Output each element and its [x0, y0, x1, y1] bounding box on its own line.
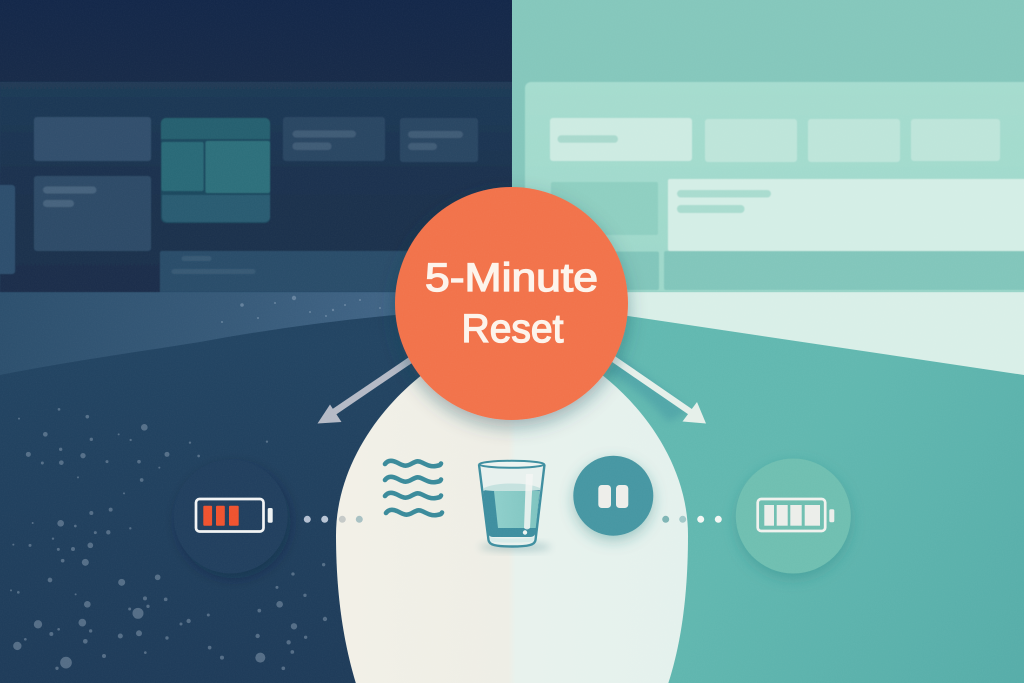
- card: top three: [808, 119, 900, 162]
- dots: right connector: [662, 516, 722, 523]
- card: side block: [551, 182, 658, 235]
- card: teal grid: [161, 118, 270, 223]
- card: top two: [705, 119, 797, 162]
- icon: breathing waves: [385, 461, 442, 515]
- dots: left connector: [304, 516, 363, 523]
- panel: left dimmed dashboard: [0, 82, 512, 292]
- speckles: scattered dust on left side: [10, 408, 327, 670]
- title: Reset: Reset: [462, 307, 564, 351]
- card: bottom wide: [664, 251, 1024, 290]
- card: small top with lines: [400, 118, 478, 162]
- card: plain top: [34, 117, 151, 161]
- panel: right bright dashboard: [520, 82, 1024, 292]
- right lighter wedge band: [512, 292, 1024, 375]
- panel: left depleted side background: [0, 0, 512, 683]
- icon: pause button: [573, 456, 653, 536]
- title: 5-Minute: 5-Minute: [425, 256, 598, 300]
- left lighter curved band: [0, 292, 512, 375]
- card: middle with lines: [34, 176, 151, 251]
- card: top with lines: [283, 117, 385, 161]
- badge: low battery: [174, 460, 288, 574]
- card: active top with line: [550, 118, 692, 161]
- arrow: shadow strip on right: [606, 358, 690, 422]
- card: main with lines: [668, 179, 1024, 251]
- card: left edge stub: [0, 185, 15, 274]
- icon: glass of water: [479, 461, 551, 551]
- panel: right side background: [512, 0, 1024, 683]
- reset circle with title: [395, 187, 628, 420]
- badge: full battery: [736, 458, 851, 574]
- speckles: dust on left band: [221, 296, 381, 323]
- card: bottom left: [520, 252, 659, 290]
- arrow: to charged battery: [612, 358, 706, 424]
- central cream egg-shaped spotlight: [336, 335, 688, 683]
- arrow: to depleted battery: [318, 359, 412, 424]
- card: top four: [911, 119, 1000, 161]
- card: bottom wide: [160, 251, 420, 292]
